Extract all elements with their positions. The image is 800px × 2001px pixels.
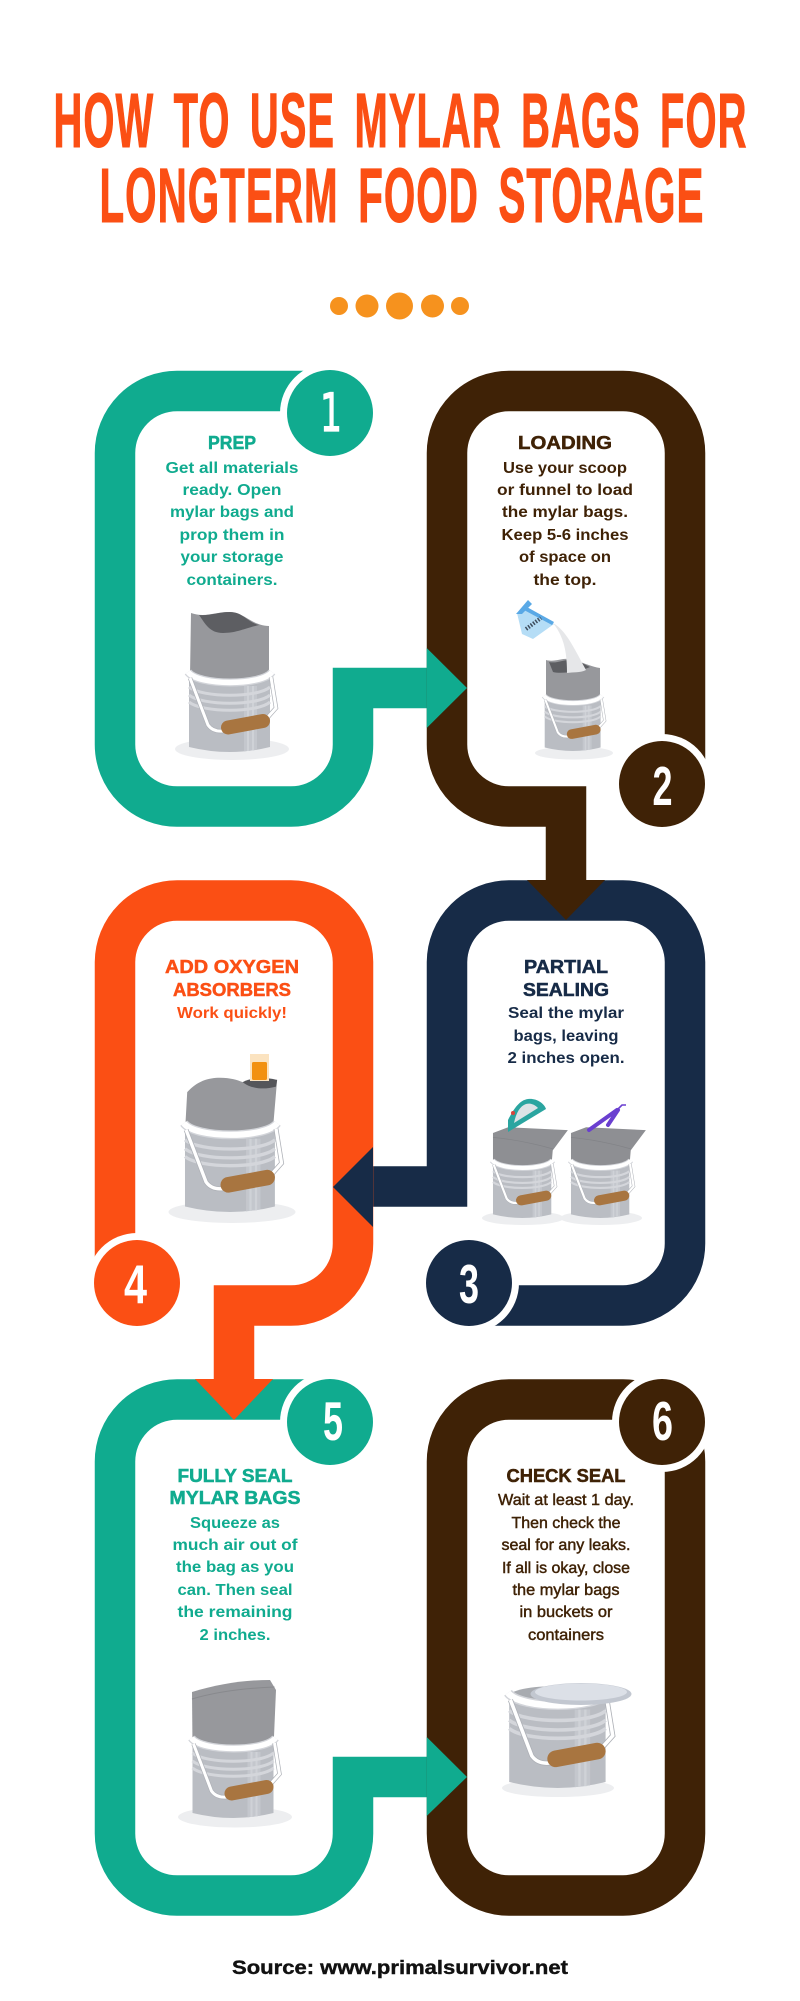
text: step 6 check seal: CHECK SEAL xyxy=(506,1466,626,1486)
text: step 3 partial sealing: SEALING xyxy=(523,980,609,1000)
text: step 1 prep: ready. Open xyxy=(182,482,282,499)
panel: step 5 band and arrow stem xyxy=(115,1400,427,1896)
decorative dot row xyxy=(330,292,469,320)
badge: number 3 xyxy=(419,1233,519,1333)
text: step 1 prep: mylar bags and xyxy=(170,504,294,521)
text: step 6 check seal xyxy=(498,1466,634,1644)
source credit: Source: www.primalsurvivor.net xyxy=(232,1958,569,1979)
badge: number 5: 5 xyxy=(323,1390,343,1452)
text: step 3 partial sealing: PARTIAL xyxy=(524,957,608,977)
badge: number 6 xyxy=(612,1370,726,1472)
text: step 2 loading: Use your scoop xyxy=(503,460,627,477)
badge: number 4 xyxy=(60,1230,187,1340)
text: step 4 add oxygen absorbers: ABSORBERS xyxy=(173,980,291,1000)
text: step 5 fully seal: the remaining xyxy=(178,1604,292,1621)
arrow: step 2 to step 3 xyxy=(527,880,605,920)
panel: step 1 band and arrow stem xyxy=(115,391,427,806)
text: step 1 prep: Get all materials xyxy=(166,460,299,477)
text: step 2 loading: the mylar bags. xyxy=(502,504,628,521)
arrow: step 1 to step 2 xyxy=(427,648,467,728)
text: step 5 fully seal: much air out of xyxy=(172,1537,298,1554)
text: step 4 add oxygen absorbers xyxy=(165,957,299,1022)
text: step 2 loading xyxy=(497,433,633,589)
panel: step 6 band xyxy=(447,1400,685,1896)
text: step 5 fully seal: the bag as you xyxy=(176,1559,294,1576)
text: step 6 check seal: the mylar bags xyxy=(512,1582,620,1599)
arrow: step 5 to step 6 xyxy=(427,1737,467,1816)
badge: number 5 xyxy=(280,1372,380,1472)
text: step 1 prep: prop them in xyxy=(180,527,284,544)
badge: number 2: 2 xyxy=(652,755,672,817)
icon: step 3 bucket with iron xyxy=(482,1099,568,1225)
text: step 2 loading: LOADING xyxy=(518,433,612,453)
text: step 6 check seal: in buckets or xyxy=(520,1604,613,1621)
icon: step 1 open bag in bucket xyxy=(175,612,289,760)
badge: number 1: 1 xyxy=(320,383,342,444)
text: step 4 add oxygen absorbers: ADD OXYGEN xyxy=(165,957,299,977)
icon: step 2 jug pouring into bag xyxy=(516,600,613,760)
text: step 1 prep: your storage xyxy=(180,549,284,566)
text: step 3 partial sealing: 2 inches open. xyxy=(508,1050,624,1067)
text: step 6 check seal: If all is okay, close xyxy=(502,1560,630,1577)
icon: step 5 sealed bag in bucket xyxy=(178,1680,292,1828)
text: step 6 check seal: containers xyxy=(528,1627,604,1644)
badge: number 6: 6 xyxy=(652,1390,673,1452)
title xyxy=(54,78,748,239)
text: step 5 fully seal: Squeeze as xyxy=(190,1515,280,1532)
text: step 6 check seal: seal for any leaks. xyxy=(502,1537,630,1554)
arrow: step 3 to step 4 xyxy=(333,1147,373,1227)
text: step 1 prep: PREP xyxy=(208,433,256,453)
text: step 6 check seal: Then check the xyxy=(512,1515,621,1532)
text: step 5 fully seal: can. Then seal xyxy=(178,1582,292,1599)
icon: step 4 oxygen absorber in bag xyxy=(168,1054,296,1223)
text: step 3 partial sealing: bags, leaving xyxy=(514,1028,618,1045)
text: step 3 partial sealing: Seal the mylar xyxy=(508,1005,624,1022)
arrow: step 4 to step 5 xyxy=(195,1379,273,1420)
panel: step 3 band and arrow stem xyxy=(373,900,685,1306)
badge: number 1 xyxy=(280,363,380,463)
text: step 1 prep: containers. xyxy=(186,572,278,589)
text: step 1 prep xyxy=(166,433,299,589)
text: step 2 loading: the top. xyxy=(534,572,596,589)
badge: number 3: 3 xyxy=(459,1253,479,1315)
text: step 4 add oxygen absorbers: Work quickly! xyxy=(177,1005,287,1022)
text: step 2 loading: Keep 5-6 inches xyxy=(502,527,629,544)
text: step 3 partial sealing xyxy=(508,957,624,1067)
panel: step 2 band and arrow stem xyxy=(447,391,685,880)
badge: number 2 xyxy=(612,730,726,840)
text: step 5 fully seal: MYLAR BAGS xyxy=(170,1488,300,1508)
text: step 2 loading: of space on xyxy=(519,549,611,566)
text: step 5 fully seal: 2 inches. xyxy=(200,1627,270,1644)
text: step 5 fully seal xyxy=(170,1466,300,1644)
badge: number 4: 4 xyxy=(124,1253,147,1315)
text: step 5 fully seal: FULLY SEAL xyxy=(178,1466,292,1486)
icon: step 3 bucket with hair straightener xyxy=(560,1105,646,1225)
text: step 6 check seal: Wait at least 1 day. xyxy=(498,1492,634,1509)
text: step 2 loading: or funnel to load xyxy=(497,482,633,499)
panel: step 4 band and arrow stem xyxy=(115,900,353,1379)
icon: step 6 bucket with lid xyxy=(502,1683,632,1797)
